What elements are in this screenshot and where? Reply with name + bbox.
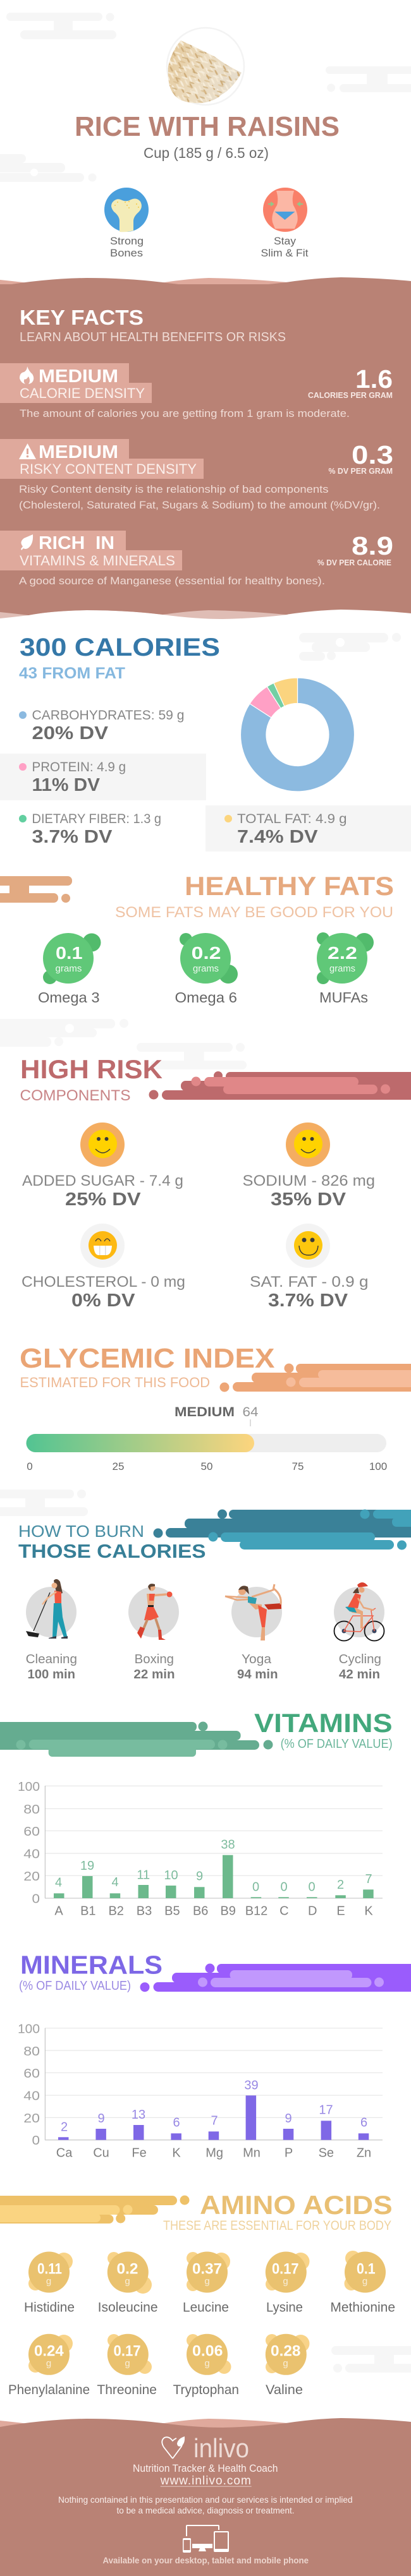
bar chart: minerals: 6 [360,2116,367,2130]
gauge axis: 50 [201,1460,212,1472]
bar chart: minerals: 0 [32,2134,40,2148]
bar chart: minerals: 17 [319,2104,333,2117]
item: cholesterol: CHOLESTEROL - 0 mg [21,1273,185,1291]
amino: methionine: Methionine [330,2300,395,2314]
fact: risky content density: % DV PER GRAM [329,467,393,476]
subheading: healthy fats: SOME FATS MAY BE GOOD FOR YOU [115,904,393,921]
fact: rich in vitamins and minerals: 8.9 [352,531,393,560]
amino: threonine: 0.17 [114,2342,141,2359]
amino: phenylalanine: g [46,2358,51,2369]
fact: rich in vitamins and minerals: % DV PER CALORIE [317,558,391,567]
bar chart: minerals: Ca [56,2146,73,2160]
panel: how to burn those calories [0,1490,411,1682]
amino: leucine [183,2251,230,2314]
bar chart: vitamins: 40 [23,1847,40,1861]
heading: glycemic index: GLYCEMIC INDEX [20,1343,275,1374]
heading: vitamins: VITAMINS [254,1708,393,1738]
bar chart: minerals: 20 [23,2112,40,2126]
fact: rich in vitamins and minerals: RICH IN [39,533,114,553]
activity: cleaning [26,1579,77,1682]
bar chart: vitamins: 60 [23,1825,40,1839]
fact: calorie density [0,363,393,419]
heading: how to burn: HOW TO BURN [18,1522,144,1541]
bar chart: vitamins: K [364,1905,373,1918]
legend: dietary fiber: DIETARY FIBER: 1.3 g [32,812,161,826]
bar chart: minerals: Mg [206,2146,223,2160]
stat: omega 6 [175,933,238,1006]
amino: phenylalanine: 0.24 [34,2342,64,2359]
amino: phenylalanine [8,2334,90,2397]
bar chart: vitamins [18,1780,383,1918]
title: RICE WITH RAISINS [75,111,340,142]
icon: strong bones [104,188,149,232]
bar chart: vitamins: B2 [108,1905,124,1918]
item: added sugar [22,1122,183,1210]
amino: lysine: 0.17 [272,2260,299,2277]
legend: protein: PROTEIN: 4.9 g [32,760,126,774]
panel: glycemic index [20,1343,411,1472]
panel: healthy fats [0,871,394,1006]
bar chart: vitamins: 7 [365,1872,372,1886]
food image: rice [164,28,244,105]
subheading: vitamins: (% OF DAILY VALUE) [281,1737,393,1751]
heading: high risk: HIGH RISK [20,1054,163,1084]
panel: high risk components [0,1019,411,1311]
icon: stay slim and fit [263,188,307,232]
activity: yoga: Yoga [242,1652,272,1666]
icon: devices [183,2525,229,2553]
item: sodium: SODIUM - 826 mg [243,1172,375,1189]
activity: cycling: 42 min [339,1668,380,1682]
bar chart: minerals: Zn [357,2146,371,2160]
activity: boxing [128,1584,179,1682]
amino: valine [266,2334,310,2397]
legend: total fat: TOTAL FAT: 4.9 g [237,812,347,826]
legend: carbohydrates [19,708,185,743]
bar chart: vitamins: 100 [18,1780,40,1794]
icon: leaf [21,534,33,550]
activity: boxing: Boxing [135,1652,174,1666]
stat: mufas [317,932,374,1006]
amino: histidine: Histidine [24,2300,75,2314]
fact: risky content density: Risky Content density is the relationship of bad components [19,483,329,495]
bar chart: vitamins: E [336,1905,345,1918]
bar chart: vitamins: B5 [164,1905,180,1918]
amino: histidine: 0.11 [37,2260,62,2277]
amino: lysine: g [283,2276,288,2287]
bar chart: vitamins: 10 [164,1869,178,1882]
fact: rich in vitamins and minerals [0,531,393,587]
panel: footer [0,2418,411,2576]
gauge axis: 25 [113,1460,124,1472]
amino: methionine: g [362,2276,367,2287]
label: strong bones [110,235,144,259]
item: cholesterol: 0% DV [71,1291,135,1311]
stat: mufas: 2.2 [328,943,357,963]
disclaimer [58,2495,353,2515]
stat: omega 3: grams [56,963,82,974]
bar chart: vitamins: B12 [245,1905,267,1918]
gauge label: 64 [243,1405,259,1419]
amino: isoleucine: 0.2 [116,2260,138,2277]
activity: cycling [334,1582,384,1682]
panel: vitamins [0,1708,393,1918]
gauge bar [27,1434,386,1452]
website link: www.inlivo.com [160,2474,251,2488]
amino: leucine: 0.37 [192,2260,222,2277]
gauge axis: 75 [292,1460,304,1472]
bar chart: vitamins: B6 [193,1905,208,1918]
logo: inlivo [162,2433,249,2463]
stat: omega 3: Omega 3 [38,989,100,1006]
bar chart: vitamins: 4 [55,1876,62,1890]
subheading: components: COMPONENTS [20,1087,130,1104]
amino: tryptophan: g [204,2358,210,2369]
bar chart: vitamins: B3 [137,1905,152,1918]
amino: tryptophan: Tryptophan [173,2383,239,2397]
legend: carbohydrates: CARBOHYDRATES: 59 g [32,708,185,723]
stat: omega 6: Omega 6 [175,989,237,1006]
legend: total fat [224,812,347,847]
item: sodium: 35% DV [271,1189,347,1210]
panel: amino acids [0,2190,411,2397]
amino: valine: g [283,2358,288,2369]
disclaimer: to be a medical advice, diagnosis or treatment. [116,2505,295,2515]
bar chart: vitamins: 20 [23,1870,40,1884]
activity: yoga [225,1584,282,1682]
icon: flame [20,366,34,384]
amino: leucine: g [204,2276,210,2287]
bar chart: minerals: P [285,2146,293,2160]
heading: key facts: KEY FACTS [20,306,144,329]
bar chart: minerals: 39 [244,2078,259,2092]
serving size: Cup (185 g / 6.5 oz) [144,145,269,161]
availability note: Available on your desktop, tablet and mobile phone [102,2555,309,2565]
logo: inlivo: inlivo [193,2433,249,2463]
heading: amino acids: AMINO ACIDS [200,2190,393,2220]
subheading: 43 from fat: 43 FROM FAT [19,665,125,682]
tagline: Nutrition Tracker & Health Coach [133,2462,278,2474]
fact: calorie density: MEDIUM [39,366,118,387]
bar chart: vitamins: 0 [280,1880,288,1894]
bar chart: vitamins: B9 [220,1905,236,1918]
bar chart: minerals: 100 [18,2023,40,2037]
bar chart: minerals: 80 [23,2045,40,2059]
fact: risky content density: (Cholesterol, Saturated Fat, Sugars & Sodium) to the amount (%DV/gr). [19,499,380,511]
item: added sugar: 25% DV [65,1189,141,1210]
bar chart: vitamins: 0 [308,1880,316,1894]
fact: risky content density [0,439,393,511]
bar chart: vitamins: C [279,1905,289,1918]
bar chart: vitamins: 80 [23,1803,40,1817]
amino: histidine: g [46,2276,51,2287]
bar chart: minerals: 40 [23,2090,40,2104]
bar chart: minerals: 7 [211,2114,218,2128]
amino: lysine [266,2251,310,2314]
bar chart: vitamins: 9 [196,1870,203,1884]
bar chart: vitamins: 4 [111,1875,119,1889]
bar chart: vitamins: A [54,1905,63,1918]
amino: valine: 0.28 [271,2342,301,2359]
fact: calorie density: 1.6 [355,364,393,394]
stat: mufas: MUFAs [319,989,368,1006]
activity: cleaning: 100 min [28,1668,75,1682]
label: stay slim and fit [261,235,309,259]
heading: minerals: MINERALS [20,1950,163,1979]
fact: risky content density: MEDIUM [39,442,118,462]
bar chart: minerals: K [172,2146,181,2160]
panel: calories [0,633,411,852]
fact: rich in vitamins and minerals: VITAMINS & MINERALS [20,553,175,569]
subheading: key facts: LEARN ABOUT HEALTH BENEFITS OR RISKS [20,330,286,344]
gauge label: MEDIUM [175,1405,235,1419]
bar chart: minerals: Se [319,2146,334,2160]
icon: warning triangle [19,443,36,459]
stat: omega 6: grams [193,963,219,974]
fact: calorie density: CALORIES PER GRAM [308,391,393,400]
subheading: glycemic index: ESTIMATED FOR THIS FOOD [20,1375,210,1390]
amino: leucine: Leucine [183,2300,229,2314]
heading: those calories: THOSE CALORIES [18,1540,206,1562]
bar chart: minerals: 9 [285,2112,292,2126]
amino: methionine: 0.1 [357,2260,376,2277]
activity: yoga: 94 min [237,1668,278,1682]
bar chart: minerals: Mn [243,2146,261,2160]
heading: healthy fats: HEALTHY FATS [185,871,394,901]
bar chart: minerals: 9 [97,2112,105,2126]
activity: cleaning: Cleaning [26,1652,77,1666]
subheading: minerals: (% OF DAILY VALUE) [19,1979,131,1993]
gauge axis [27,1460,387,1472]
panel: header [0,13,411,259]
item: saturated fat [250,1224,368,1311]
stat: mufas: grams [329,963,355,974]
legend: dietary fiber: 3.7% DV [32,827,113,847]
gauge axis: 100 [369,1460,387,1472]
stat: omega 3: 0.1 [56,943,83,963]
amino: isoleucine: Isoleucine [98,2300,158,2314]
item: saturated fat: SAT. FAT - 0.9 g [250,1273,368,1291]
bar chart: vitamins: 2 [337,1878,344,1892]
item: saturated fat: 3.7% DV [268,1291,348,1311]
amino: tryptophan: 0.06 [192,2342,223,2359]
legend: dietary fiber [19,812,161,847]
label: strong bones: Strong [110,235,144,247]
donut chart [240,678,354,791]
item: sodium [243,1122,375,1210]
amino: phenylalanine: Phenylalanine [8,2383,90,2397]
bar chart: minerals: 13 [132,2108,145,2122]
item: added sugar: ADDED SUGAR - 7.4 g [22,1172,183,1189]
amino: threonine: g [125,2358,130,2369]
stat: omega 3 [38,933,101,1006]
amino: isoleucine [98,2251,158,2314]
bar chart: minerals [18,2023,383,2160]
legend: protein [19,760,126,795]
fact: rich in vitamins and minerals: A good source of Manganese (essential for healthy bones). [19,575,325,587]
label: strong bones: Bones [110,247,143,259]
amino: valine: Valine [266,2383,303,2397]
bar chart: vitamins: 19 [80,1859,94,1873]
bar chart: vitamins: 38 [221,1838,235,1852]
bar chart: vitamins: 0 [252,1880,259,1894]
bar chart: minerals: 2 [61,2120,68,2134]
bar chart: vitamins: 11 [137,1868,150,1882]
item: cholesterol [21,1224,185,1311]
panel: minerals [18,1950,411,2160]
bar chart: vitamins: 0 [32,1893,40,1906]
bar chart: vitamins: D [308,1905,317,1918]
amino: methionine [330,2251,395,2314]
legend: protein: 11% DV [32,775,101,795]
disclaimer: Nothing contained in this presentation and our services is intended or implied [58,2495,353,2505]
stat: omega 6: 0.2 [192,943,221,963]
amino: histidine [24,2251,75,2314]
fact: calorie density: The amount of calories you are getting from 1 gram is moderate. [20,407,350,419]
fact: calorie density: CALORIE DENSITY [20,385,145,401]
panel: key facts [0,277,411,619]
amino: threonine [97,2334,157,2397]
bar chart: minerals: 6 [173,2116,180,2130]
gauge axis: 0 [27,1460,33,1472]
legend: total fat: 7.4% DV [237,827,318,847]
bar chart: minerals: 60 [23,2067,40,2081]
amino: lysine: Lysine [266,2300,303,2314]
label: stay slim and fit: Slim & Fit [261,247,309,259]
amino: isoleucine: g [125,2276,130,2287]
activity: cycling: Cycling [339,1652,381,1666]
gauge label [175,1405,259,1419]
legend: carbohydrates: 20% DV [32,723,109,743]
bar chart: vitamins: B1 [80,1905,96,1918]
heading: 300 calories: 300 CALORIES [20,634,220,661]
fact: risky content density: RISKY CONTENT DENSITY [20,461,197,477]
fact: risky content density: 0.3 [352,440,393,469]
amino: tryptophan [173,2334,239,2397]
amino: threonine: Threonine [97,2383,157,2397]
bar chart: minerals: Cu [93,2146,109,2160]
activity: boxing: 22 min [133,1668,175,1682]
label: stay slim and fit: Stay [274,235,296,247]
bar chart: minerals: Fe [132,2146,147,2160]
